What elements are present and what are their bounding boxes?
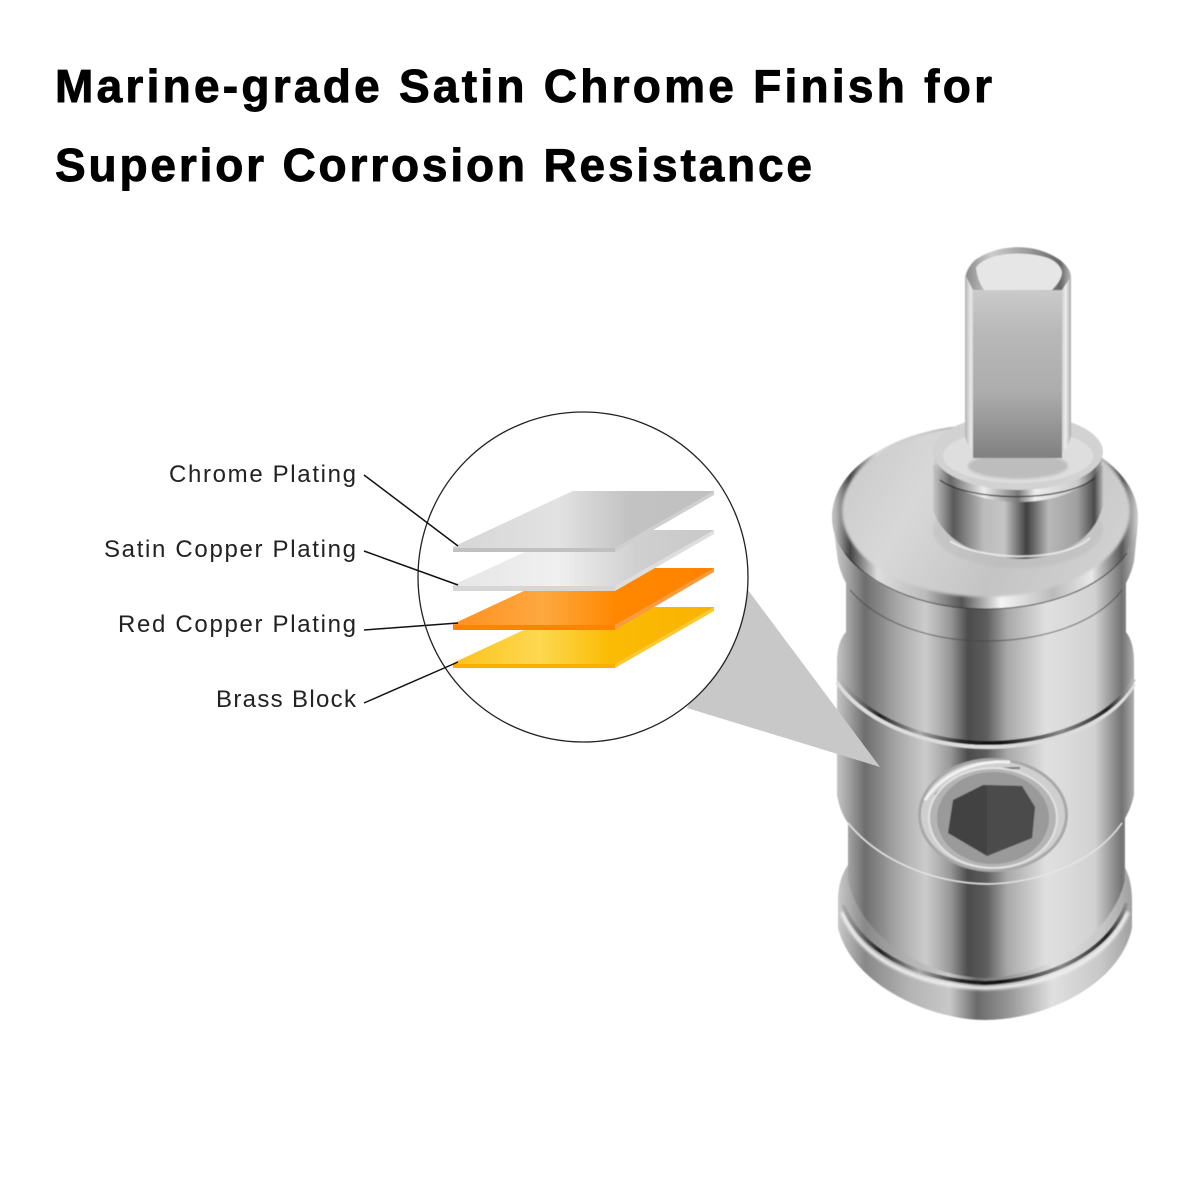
- zoom callout wedge: [687, 590, 880, 767]
- layer: red copper: [453, 568, 714, 630]
- layer labels: Satin Copper Plating: [104, 536, 356, 563]
- layer labels: [104, 461, 357, 713]
- top flange side: [833, 522, 1138, 641]
- upper body groove: [837, 677, 1134, 747]
- layer labels: Chrome Plating: [169, 461, 356, 488]
- layer: satin copper: [453, 530, 714, 591]
- hex socket: [948, 785, 1035, 856]
- middle band: [837, 632, 1134, 884]
- product: chrome terminal connector: [832, 247, 1138, 1020]
- layer: brass block: [453, 607, 714, 668]
- top flange dark edge: [845, 553, 1127, 609]
- upper body below flange: [846, 560, 1126, 700]
- title: Superior Corrosion Resistance: [55, 139, 812, 191]
- shaft top face: [976, 254, 1062, 290]
- flange lower line: [850, 590, 1122, 641]
- layer labels: Red Copper Plating: [118, 611, 356, 638]
- square shaft: [965, 247, 1071, 458]
- title: Marine-grade Satin Chrome Finish for: [55, 60, 992, 112]
- plating layers: [453, 491, 714, 668]
- collar shadow on disc: [933, 492, 1103, 568]
- layer labels: Brass Block: [216, 686, 357, 713]
- hex screw recess: [918, 758, 1068, 872]
- leader lines: [364, 475, 458, 703]
- collar: [933, 414, 1103, 559]
- title: [55, 60, 992, 191]
- magnifier circle: [418, 412, 748, 742]
- top flange disc face: [842, 425, 1130, 597]
- layer: chrome: [453, 491, 714, 552]
- shaft flat face: [973, 291, 1062, 458]
- lower body: [843, 815, 1127, 983]
- bottom flange: [838, 862, 1132, 1020]
- top flange rim: [832, 425, 1138, 609]
